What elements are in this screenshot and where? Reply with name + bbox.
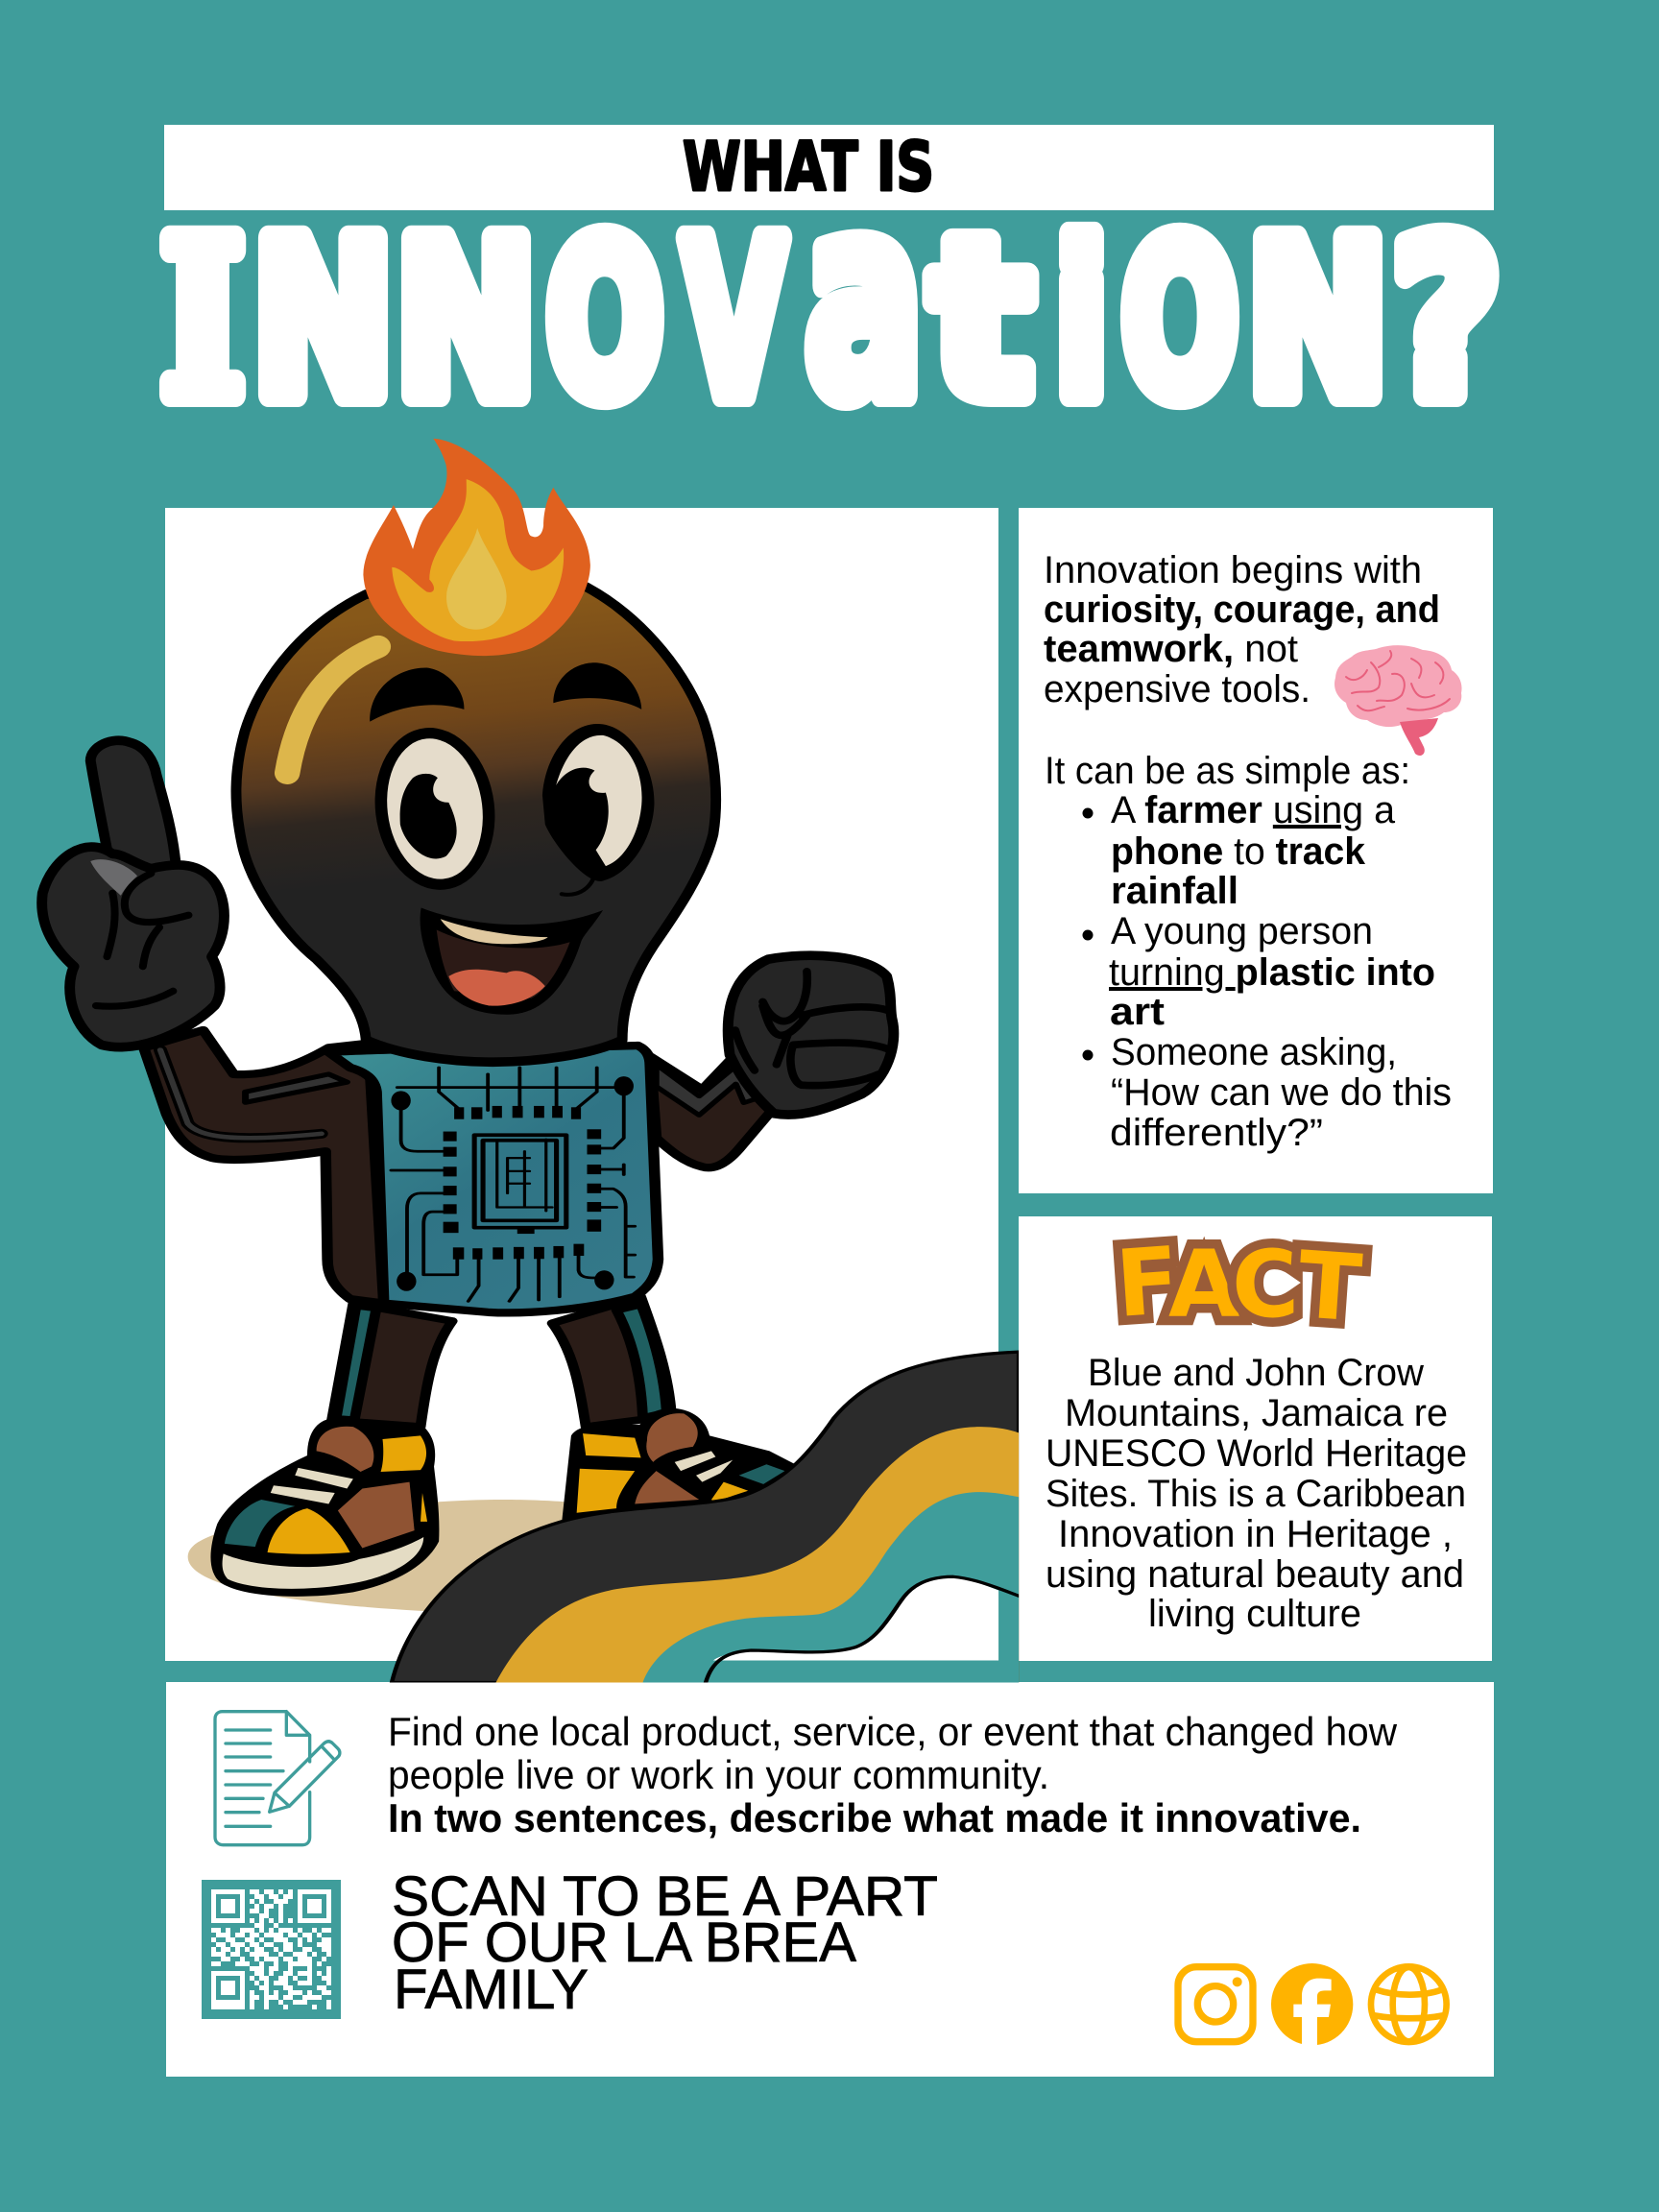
title: innovation: t [931,191,1032,446]
icon: instagram [1178,1967,1253,2042]
panel: activity and contact [166,1682,1494,2077]
ground shadow [188,1500,565,1611]
bullet list: phone to track [1111,830,1366,873]
title: innovation: O [546,195,663,445]
title: innovation: V [683,195,785,445]
mascot: head and hands [42,439,894,1115]
title: innovation: O [1121,195,1238,445]
left pointing hand [42,740,224,1047]
title: innovation: N [1247,195,1388,445]
head bulb [236,587,716,1062]
right arm [650,1054,773,1167]
fact text: Innovation in Heritage , [1058,1513,1453,1555]
bullet list [1083,789,1452,1154]
mouth [421,908,603,1015]
eyebrows [370,662,641,722]
circuit pads [391,1076,634,1291]
bullet list: differently?” [1110,1112,1323,1154]
icon: facebook [1271,1963,1353,2047]
fact text: Blue and John Crow [1088,1352,1424,1394]
intro text [1044,549,1440,792]
intro text: expensive tools. [1044,668,1310,710]
call to action [392,1865,938,2021]
fact text: Sites. This is a Caribbean [1046,1473,1466,1515]
panel: what innovation can be [1019,508,1493,1193]
fact text: using natural beauty and [1046,1553,1464,1596]
activity text: Find one local product, service, or event that changed how [388,1709,1398,1754]
title: innovation: N [252,195,394,445]
bullet list: Someone asking, [1111,1031,1397,1073]
bullet list: turning plastic into [1109,951,1435,994]
heading banner: what is [164,125,1494,210]
intro text: Innovation begins with [1044,549,1422,591]
title: innovation: i [1055,199,1108,445]
bullet list: art [1110,991,1165,1033]
intro text: It can be as simple as: [1045,750,1410,792]
shirt with circuit [328,1046,658,1312]
right fist [728,955,894,1115]
call to action: OF OUR LA BREA [392,1911,856,1974]
icon: brain [1334,645,1462,756]
activity text [388,1709,1398,1840]
intro text: curiosity, courage, and [1044,589,1440,631]
left arm and torso side [144,1030,384,1304]
bullet list: rainfall [1111,870,1238,912]
left shoe [210,1418,439,1597]
right eye [542,724,654,895]
social icons [1178,1963,1447,2047]
right leg [552,1297,671,1427]
left leg [332,1304,452,1427]
right shoe [562,1408,795,1526]
title: innovation: N [396,195,537,445]
icon: document and pencil [215,1712,340,1845]
flame [363,439,590,656]
bullet list: A young person [1111,910,1373,952]
mascot: lower body [144,1030,795,1611]
fact logo: FACT [1113,1227,1365,1343]
qr code [202,1880,341,2019]
title: innovation: a [805,141,924,460]
bullet list: A farmer using a [1111,789,1396,831]
heading banner: what is: WHAT IS [683,128,934,206]
fact text: living culture [1148,1593,1361,1635]
activity text: In two sentences, describe what made it innovative. [388,1795,1361,1840]
title: innovation: I [161,193,244,445]
icon: globe [1371,1966,1447,2042]
bullet list: “How can we do this [1111,1071,1452,1114]
highlight [287,647,378,773]
intro text: teamwork, not [1044,628,1298,670]
call to action: SCAN TO BE A PART [392,1865,938,1928]
circuit traces [391,1068,635,1301]
decorative ribbon [392,1352,1021,1684]
title: innovation: ? [1392,195,1501,445]
call to action: FAMILY [394,1959,589,2021]
fact text [1046,1352,1467,1635]
fact text: UNESCO World Heritage [1046,1432,1467,1475]
panel: fact [1019,1216,1492,1661]
panel: mascot background [165,508,998,1661]
activity text: people live or work in your community. [388,1752,1049,1797]
fact text: Mountains, Jamaica re [1065,1392,1448,1434]
left eye [366,722,504,895]
